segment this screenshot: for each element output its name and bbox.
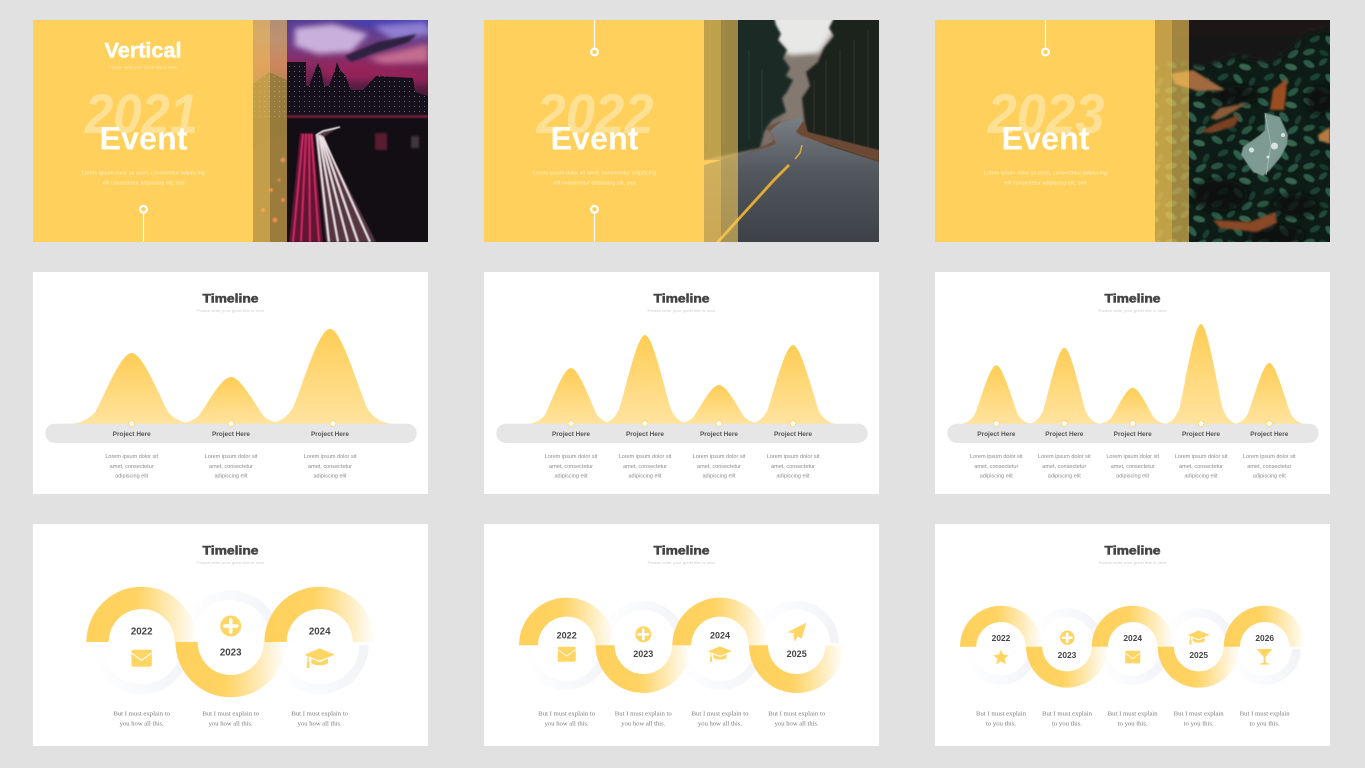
captions: to you this.: [1052, 720, 1082, 728]
icon: cocktail glass: [1257, 649, 1272, 665]
icon: envelope: [131, 650, 152, 667]
slide: ring timeline, three years: [33, 524, 428, 746]
descriptions: adipiscing elit: [1048, 474, 1081, 480]
description: Lorem ipsum dolor sit amet, consectetur adipiscing: [82, 170, 205, 176]
descriptions: amet, consectetur: [974, 464, 1019, 470]
subtitle: Please write your great title is here: [1098, 308, 1167, 313]
white panel: [484, 524, 879, 746]
subtitle: Please write your great title is here: [196, 308, 265, 313]
title: Timeline: [1104, 544, 1161, 558]
yellow panel: [935, 20, 1330, 242]
year labels: 2022: [557, 630, 577, 640]
description: elit consectetur adipiscing elit, sed: [1004, 180, 1086, 186]
grey track: [45, 424, 417, 443]
project labels: Project Here: [1250, 431, 1289, 438]
year watermark: 2021: [84, 82, 198, 145]
connector pin: top: [1042, 20, 1049, 55]
descriptions: adipiscing elit: [980, 474, 1013, 480]
year labels: [992, 633, 1274, 660]
yellow arcs: [86, 587, 375, 697]
captions: to you this.: [1250, 720, 1280, 728]
descriptions: [970, 454, 1296, 480]
project labels: [977, 431, 1289, 438]
captions: to you this.: [1118, 720, 1148, 728]
peak chart: [67, 329, 396, 424]
subtitle: Please write your great title is here: [196, 560, 265, 565]
descriptions: adipiscing elit: [554, 474, 588, 480]
descriptions: Lorem ipsum dolor sit: [1243, 454, 1296, 460]
captions: you how all this.: [545, 720, 589, 728]
year labels: 2025: [787, 649, 807, 659]
description: [82, 170, 205, 186]
year labels: 2024: [710, 630, 730, 640]
year labels: 2023: [1058, 650, 1077, 660]
peak chart: [958, 324, 1307, 424]
captions: you how all this.: [120, 720, 164, 728]
captions: you how all this.: [209, 720, 253, 728]
translucent band: dark: [1172, 20, 1189, 242]
photo: forest road: [704, 20, 879, 242]
descriptions: adipiscing elit: [628, 474, 662, 480]
project labels: Project Here: [1045, 431, 1084, 438]
translucent band: light: [253, 20, 270, 242]
descriptions: adipiscing elit: [1184, 474, 1218, 480]
title: Timeline: [654, 292, 710, 306]
slide: 2021 event: [33, 20, 428, 242]
grey rings: [529, 606, 834, 686]
title: Event: Event: [100, 120, 188, 156]
yellow panel: [484, 20, 879, 242]
project labels: Project Here: [113, 431, 151, 438]
captions: But I must explain: [1042, 710, 1093, 718]
year labels: 2023: [220, 647, 242, 658]
description: [533, 170, 656, 186]
title: Event: Event: [550, 120, 639, 156]
year labels: 2023: [633, 649, 653, 659]
descriptions: amet, consectetur: [110, 464, 154, 470]
descriptions: Lorem ipsum dolor sit: [619, 454, 672, 460]
icon: plus: [1060, 630, 1074, 645]
descriptions: Lorem ipsum dolor sit: [304, 454, 357, 460]
slide: ring timeline, five years: [935, 524, 1330, 746]
captions: But I must explain to: [692, 710, 748, 718]
year labels: 2022: [992, 633, 1011, 643]
captions: But I must explain to: [538, 710, 595, 718]
descriptions: Lorem ipsum dolor sit: [105, 454, 159, 460]
description: [984, 170, 1107, 186]
markers: [568, 420, 796, 426]
icon: envelope: [558, 647, 576, 662]
descriptions: amet, consectetur: [1111, 464, 1155, 470]
descriptions: adipiscing elit: [1253, 474, 1286, 480]
icon: star: [993, 650, 1009, 664]
captions: you how all this.: [298, 720, 342, 728]
captions: you how all this.: [621, 720, 666, 728]
captions: But I must explain: [1108, 710, 1159, 718]
descriptions: Lorem ipsum dolor sit: [1038, 454, 1091, 460]
white panel: [484, 272, 879, 494]
subtitle: Please write your great title is here: [648, 308, 716, 313]
descriptions: Lorem ipsum dolor sit: [1106, 454, 1160, 460]
heading: Vertical: Vertical: [104, 40, 182, 62]
project labels: Project Here: [1182, 431, 1220, 438]
white panel: [33, 524, 428, 746]
connector pin: bottom: [591, 206, 598, 242]
year watermark: 2023: [987, 82, 1104, 145]
year labels: [131, 627, 331, 658]
connector pin: bottom: [140, 206, 147, 242]
captions: [976, 710, 1291, 728]
captions: But I must explain to: [615, 710, 672, 718]
project labels: Project Here: [552, 431, 590, 438]
title: Timeline: [202, 292, 259, 306]
year labels: [557, 630, 807, 659]
translucent band: light: [704, 20, 721, 242]
slide: 2022 event: [484, 20, 879, 242]
captions: But I must explain to: [113, 710, 170, 718]
subtitle: Please write your great title is here: [1098, 560, 1167, 565]
captions: to you this.: [986, 720, 1016, 728]
descriptions: adipiscing elit: [314, 474, 347, 480]
slide: ring timeline, four years: [484, 524, 879, 746]
icon: graduation cap: [1188, 630, 1210, 645]
grey track: [496, 424, 868, 443]
markers: [129, 420, 336, 426]
captions: But I must explain to: [202, 710, 259, 718]
captions: [113, 710, 348, 728]
captions: to you this.: [1184, 720, 1214, 728]
title: Timeline: [202, 544, 259, 558]
captions: But I must explain: [976, 710, 1027, 718]
captions: But I must explain to: [768, 710, 825, 718]
white panel: [33, 272, 428, 494]
descriptions: amet, consectetur: [771, 464, 815, 470]
descriptions: Lorem ipsum dolor sit: [545, 454, 598, 460]
descriptions: Lorem ipsum dolor sit: [767, 454, 820, 460]
project labels: Project Here: [1114, 431, 1152, 438]
connector pin: top: [591, 20, 598, 55]
descriptions: amet, consectetur: [209, 464, 253, 470]
captions: you how all this.: [775, 720, 819, 728]
year labels: 2025: [1189, 650, 1208, 660]
descriptions: adipiscing elit: [1116, 474, 1150, 480]
subtitle: Please write your great title is here: [648, 560, 716, 565]
captions: But I must explain: [1240, 710, 1291, 718]
descriptions: adipiscing elit: [776, 474, 810, 480]
icon: plus: [220, 616, 241, 636]
descriptions: amet, consectetur: [308, 464, 352, 470]
captions: But I must explain to: [291, 710, 348, 718]
project labels: [552, 431, 812, 438]
title: Event: Event: [1002, 120, 1090, 156]
captions: you how all this.: [698, 720, 742, 728]
descriptions: amet, consectetur: [697, 464, 741, 470]
descriptions: Lorem ipsum dolor sit: [693, 454, 746, 460]
slide: 2023 event: [935, 20, 1330, 242]
translucent band: dark: [721, 20, 738, 242]
year labels: 2024: [1123, 633, 1142, 643]
descriptions: amet, consectetur: [1042, 464, 1087, 470]
description: elit consectetur adipiscing elit, sed: [554, 180, 636, 186]
project labels: Project Here: [212, 431, 250, 438]
year labels: 2026: [1255, 633, 1274, 643]
project labels: [113, 431, 349, 438]
project labels: Project Here: [977, 431, 1016, 438]
description: elit consectetur adipiscing elit, sed: [102, 180, 184, 186]
project labels: Project Here: [311, 431, 349, 438]
description: Lorem ipsum dolor sit amet, consectetur adipiscing: [984, 170, 1107, 176]
icon: plus: [635, 626, 651, 642]
yellow arcs: [519, 598, 844, 693]
grey rings: [970, 613, 1296, 680]
captions: [538, 710, 825, 728]
year watermark: 2022: [536, 82, 654, 145]
year labels: 2022: [131, 627, 152, 638]
descriptions: Lorem ipsum dolor sit: [970, 454, 1023, 460]
description: Lorem ipsum dolor sit amet, consectetur adipiscing: [533, 170, 656, 176]
white panel: [935, 272, 1330, 494]
slide: timeline, five peaks: [935, 272, 1330, 494]
icon: envelope: [1125, 651, 1140, 663]
slide: timeline, four peaks: [484, 272, 879, 494]
descriptions: Lorem ipsum dolor sit: [205, 454, 258, 460]
title: Timeline: [654, 544, 710, 558]
translucent band: light: [1155, 20, 1172, 242]
project labels: Project Here: [626, 431, 664, 438]
descriptions: [545, 454, 820, 480]
project labels: Project Here: [774, 431, 812, 438]
icon: graduation cap: [304, 648, 335, 668]
year labels: 2024: [309, 627, 331, 638]
peak chart: [525, 335, 839, 424]
grey rings: [97, 595, 364, 689]
photo: leaves with water drops: [1155, 20, 1330, 242]
project labels: Project Here: [700, 431, 738, 438]
descriptions: amet, consectetur: [549, 464, 593, 470]
icon: graduation cap: [708, 646, 732, 662]
descriptions: amet, consectetur: [1247, 464, 1292, 470]
grey track: [947, 424, 1319, 443]
title: Timeline: [1104, 292, 1161, 306]
descriptions: adipiscing elit: [214, 474, 248, 480]
markers: [993, 420, 1272, 426]
descriptions: amet, consectetur: [1179, 464, 1223, 470]
descriptions: adipiscing elit: [115, 474, 149, 480]
icon: paper plane: [787, 623, 806, 642]
captions: But I must explain: [1174, 710, 1225, 718]
white panel: [935, 524, 1330, 746]
descriptions: [105, 454, 357, 480]
yellow arcs: [960, 606, 1306, 688]
translucent band: dark: [270, 20, 287, 242]
subtitle: Please write your great title is here: [109, 64, 178, 70]
descriptions: Lorem ipsum dolor sit: [1175, 454, 1228, 460]
slide: timeline, three peaks: [33, 272, 428, 494]
descriptions: adipiscing elit: [702, 474, 736, 480]
photo: city skyline with light trails: [253, 20, 428, 242]
yellow panel: [33, 20, 428, 242]
descriptions: amet, consectetur: [623, 464, 667, 470]
